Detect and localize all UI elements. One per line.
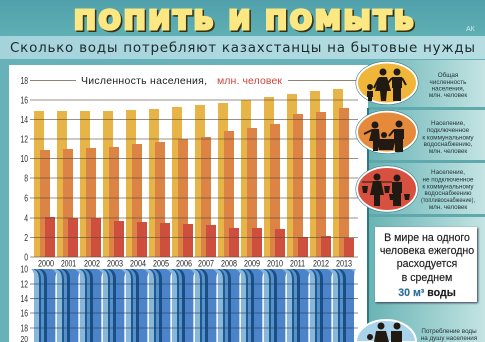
x axis year labels: 2013 xyxy=(336,258,352,270)
right column background xyxy=(368,60,485,342)
caption: water consumption: Потребление воды xyxy=(421,327,477,335)
lower y axis labels: 16 xyxy=(20,308,28,320)
x axis year labels: 2001 xyxy=(61,258,76,270)
white chart panel xyxy=(9,65,368,342)
caption: connected xyxy=(422,120,474,155)
x axis year labels: 2005 xyxy=(153,258,169,270)
callout: world water use xyxy=(375,227,477,302)
caption: not connected: не подключенное xyxy=(422,176,474,184)
lower y axis labels: 10 xyxy=(20,264,28,276)
y axis labels: 2 xyxy=(24,233,28,244)
callout: world water use: человека ежегодно xyxy=(380,245,474,257)
y axis labels xyxy=(20,76,28,264)
y axis labels: 16 xyxy=(20,96,28,106)
x axis year labels: 2006 xyxy=(176,258,192,270)
callout: world water use: в среднем xyxy=(402,272,452,284)
caption: not connected: водоснабжению xyxy=(425,189,472,197)
lower y axis labels xyxy=(20,264,28,342)
caption: total population: млн. человек xyxy=(429,92,467,99)
y axis labels: 10 xyxy=(20,154,28,165)
callout: world water use: В мире на одного xyxy=(384,232,470,244)
caption: total population: населения, xyxy=(432,86,465,92)
x axis year labels: 2003 xyxy=(107,258,123,270)
caption: water consumption: на душу населения xyxy=(421,335,477,342)
icon: family on yellow oval xyxy=(356,61,418,105)
y axis labels: 6 xyxy=(24,194,28,204)
caption: not connected: Население, xyxy=(431,169,465,176)
row dividers xyxy=(369,107,485,217)
lower grid lines xyxy=(30,284,358,328)
y axis labels: 14 xyxy=(20,115,28,126)
subtitle band xyxy=(0,36,485,59)
x axis year labels: 2008 xyxy=(221,258,237,270)
y axis labels: 4 xyxy=(24,214,28,224)
grid lines xyxy=(30,100,358,257)
caption: not connected: млн. человек xyxy=(429,204,467,211)
x axis year labels: 2011 xyxy=(290,258,305,270)
signature mark: АК xyxy=(466,26,476,33)
callout: world water use: расходуется xyxy=(397,258,457,270)
title: ПОПИТЬ И ПОМЫТЬ xyxy=(76,8,416,38)
icon: family on blue oval xyxy=(356,320,416,342)
callout figure: 30 м³ воды xyxy=(398,287,456,299)
caption: total population: численность xyxy=(430,79,467,86)
caption: connected: водоснабжению, xyxy=(424,140,473,148)
chart heading: млн. человек xyxy=(217,75,282,87)
orange bars: connected to water supply xyxy=(40,108,349,257)
y axis labels: 18 xyxy=(20,76,28,87)
y axis labels: 8 xyxy=(24,174,28,184)
x axis year labels xyxy=(38,258,352,270)
caption: not connected: к коммунальному xyxy=(422,184,474,190)
y axis labels: 0 xyxy=(24,252,28,264)
caption: total population xyxy=(429,71,467,99)
lower y axis labels: 12 xyxy=(20,280,28,290)
icon: people carrying buckets on red oval xyxy=(356,166,418,212)
chart heading xyxy=(30,75,358,87)
y axis labels: 12 xyxy=(20,134,28,146)
legend: not connected xyxy=(356,166,475,212)
lower chart: water consumption columns xyxy=(20,264,358,342)
chart heading: Численность населения, xyxy=(81,75,207,87)
legend: total population xyxy=(356,61,467,105)
caption: water consumption xyxy=(421,327,477,342)
legend: water consumption per person xyxy=(356,320,477,342)
vertical divider xyxy=(367,108,369,342)
lower y axis labels: 18 xyxy=(20,324,28,334)
x axis year labels: 2000 xyxy=(38,258,54,270)
red bars: not connected to water supply xyxy=(45,217,354,257)
x axis year labels: 2004 xyxy=(130,258,146,270)
caption: connected: к коммунальному xyxy=(422,134,474,142)
x axis year labels: 2012 xyxy=(313,258,329,270)
icon: family washing on orange oval xyxy=(356,110,418,154)
title band xyxy=(0,0,485,36)
subtitle: Сколько воды потребляют казахстанцы на бытовые нужды xyxy=(10,40,475,56)
caption: connected: Население, xyxy=(431,120,465,127)
lower y axis labels: 14 xyxy=(20,294,28,305)
caption: connected: млн. человек xyxy=(429,148,467,155)
x axis year labels: 2002 xyxy=(84,258,100,270)
caption: not connected: (топливоснабжение), xyxy=(421,196,475,204)
caption: connected: подключенное xyxy=(427,127,470,134)
upper bar chart: population xyxy=(20,75,358,270)
x axis year labels: 2007 xyxy=(198,258,214,270)
title: ПОПИТЬ И ПОМЫТЬ xyxy=(74,6,414,36)
blue water columns xyxy=(31,269,356,342)
yellow bars: total population xyxy=(34,89,343,257)
caption: total population: Общая xyxy=(438,71,458,79)
caption: not connected xyxy=(421,169,475,211)
x axis year labels: 2009 xyxy=(244,258,260,270)
x axis year labels: 2010 xyxy=(267,258,283,270)
legend: connected to water supply xyxy=(356,110,474,155)
